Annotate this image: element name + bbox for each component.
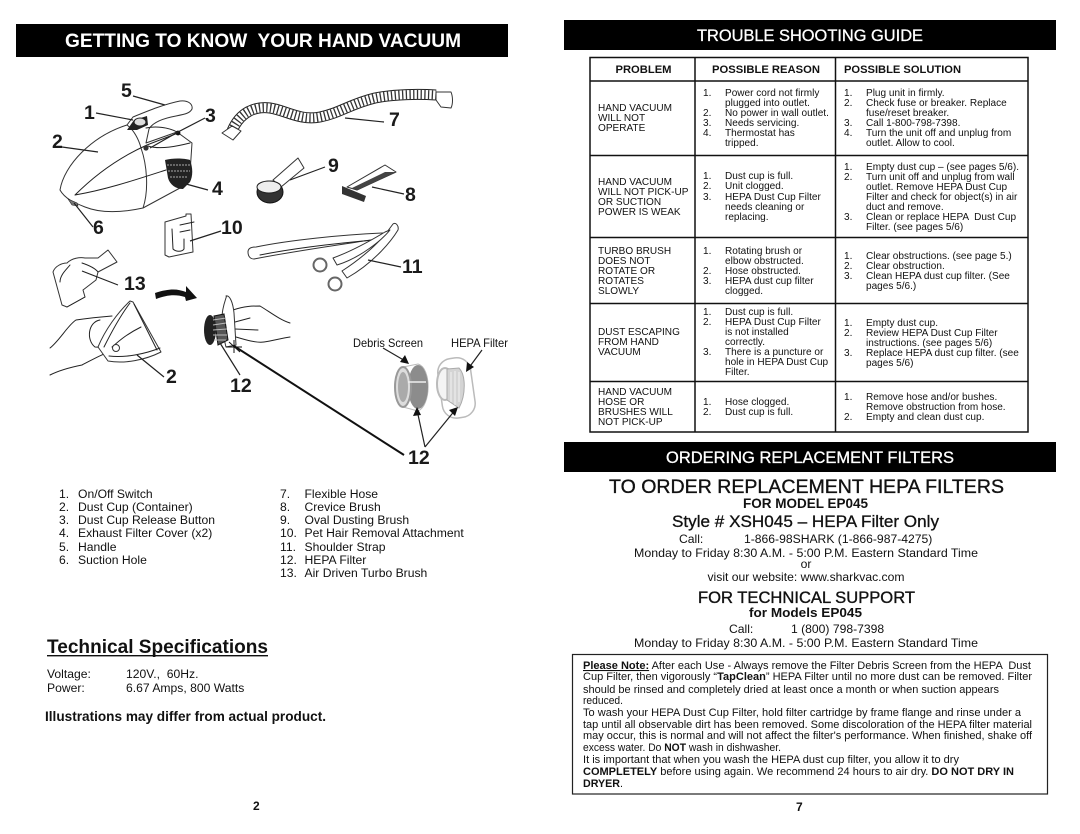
row: dust escaping: Filter.	[725, 367, 750, 378]
parts list: right column: 10.	[280, 526, 297, 540]
ordering information	[609, 477, 1004, 584]
icon: air driven turbo brush	[53, 250, 117, 307]
row: turbo brush: 3.	[703, 276, 711, 287]
row: turbo brush: Clear obstructions. (see page 5.)	[866, 251, 1012, 262]
table grid	[590, 58, 1028, 432]
icon: crevice brush	[342, 165, 396, 202]
page number 2: 2	[253, 799, 260, 813]
parts list: right column: 13.	[280, 566, 297, 580]
parts list: right column: Pet Hair Removal Attachment	[304, 526, 464, 540]
part number labels: 12	[408, 447, 430, 469]
row: dust escaping: 2.	[703, 317, 711, 328]
row: will not operate: 1.	[844, 88, 852, 99]
row: will not operate: No power in wall outlet.	[725, 108, 829, 119]
ordering information: FOR MODEL EP045	[743, 496, 868, 511]
row: turbo brush: SLOWLY	[598, 286, 639, 297]
table header: POSSIBLE SOLUTION	[844, 64, 961, 76]
parts list: right column: 7.	[280, 487, 290, 501]
row: will not pick-up: 2.	[844, 172, 852, 183]
row: will not operate: Power cord not firmly	[725, 88, 819, 99]
row: turbo brush: 1.	[703, 246, 711, 257]
illustration: hand vacuum parts diagram	[50, 80, 508, 469]
page number 7: 7	[796, 800, 803, 814]
row: will not pick-up: 2.	[703, 181, 711, 192]
row: will not pick-up: 3.	[844, 212, 852, 223]
row: hose or brushes: 1.	[844, 392, 852, 403]
specifications text: Voltage:	[47, 667, 91, 681]
parts list: left column: 6.	[59, 553, 69, 567]
row: will not pick-up: Turn unit off and unplug from wall	[866, 172, 1015, 183]
part number labels	[52, 80, 508, 469]
parts list: left column: 1.	[59, 487, 69, 501]
part number labels: 2	[166, 366, 177, 388]
icon: flexible hose	[222, 92, 452, 140]
row: hose or brushes: 1.	[703, 397, 711, 408]
part number labels: 7	[389, 109, 400, 131]
row: will not pick-up: Dust cup is full.	[725, 171, 793, 182]
row: dust escaping: VACUUM	[598, 347, 641, 358]
icon: hand holding dust cup	[50, 301, 161, 375]
row: hose or brushes: 2.	[703, 407, 711, 418]
row: will not operate: Turn the unit off and unplug from	[866, 128, 1011, 139]
note box: excess water. Do NOT wash in dishwasher.	[583, 742, 781, 754]
part number labels: 10	[221, 217, 243, 239]
row: turbo brush: HEPA dust cup filter	[725, 276, 814, 287]
row: will not pick-up: replacing.	[725, 212, 769, 223]
heading: technical specifications: Technical Specifications	[47, 637, 268, 658]
row: dust escaping: Dust cup is full.	[725, 307, 793, 318]
parts list: left column: Dust Cup (Container)	[78, 500, 193, 514]
row: turbo brush: ROTATES	[598, 276, 644, 287]
row: will not pick-up: HAND VACUUM	[598, 177, 672, 188]
row: will not operate: plugged into outlet.	[725, 98, 810, 109]
row: dust escaping: Review HEPA Dust Cup Filter	[866, 328, 998, 339]
note box: should be rinsed and completely dried at least once a month or when suction appears	[583, 684, 999, 696]
row: will not pick-up: POWER IS WEAK	[598, 207, 681, 218]
row: turbo brush: Hose obstructed.	[725, 266, 801, 277]
note box: It is important that when you wash the HEPA dust cup filter, you allow it to dry	[583, 754, 960, 766]
row: hose or brushes: Dust cup is full.	[725, 407, 793, 418]
row: dust escaping	[598, 307, 1019, 378]
row: will not operate: OPERATE	[598, 123, 646, 134]
row: turbo brush: 2.	[844, 261, 852, 272]
heading bar: ordering replacement filters	[564, 442, 1056, 472]
parts list: right column: 8.	[280, 500, 290, 514]
table header: POSSIBLE REASON	[712, 64, 820, 76]
icon: hand holding HEPA filter	[204, 296, 290, 347]
parts list: right column: Oval Dusting Brush	[304, 513, 409, 527]
heading bar: getting to know your hand vacuum: GETTING TO KNOW YOUR HAND VACUUM	[65, 31, 461, 52]
row: will not pick-up: OR SUCTION	[598, 197, 661, 208]
technical support information: Call:	[729, 622, 753, 636]
row: will not pick-up: WILL NOT PICK-UP	[598, 187, 689, 198]
icon: debris screen	[395, 364, 428, 411]
ordering information: Call:	[679, 532, 703, 546]
note box: reduced.	[583, 695, 623, 707]
row: will not pick-up	[598, 162, 1019, 233]
row: dust escaping: Empty dust cup.	[866, 318, 938, 329]
parts list: left column: On/Off Switch	[78, 487, 153, 501]
part number labels: Debris Screen	[353, 337, 423, 350]
row: will not operate: HAND VACUUM	[598, 103, 672, 114]
note box	[572, 654, 1048, 794]
parts list: left column: Dust Cup Release Button	[78, 513, 215, 527]
parts list: left column	[59, 487, 215, 567]
row: dust escaping: instructions. (see pages 5/6)	[866, 338, 992, 349]
row: hose or brushes: Remove hose and/or bushes.	[866, 392, 997, 403]
row: will not operate	[598, 88, 1011, 149]
row: will not operate: 3.	[703, 118, 711, 129]
ordering information: visit our website: www.sharkvac.com	[707, 570, 905, 584]
row: will not operate: Plug unit in firmly.	[866, 88, 945, 99]
row: turbo brush: ROTATE OR	[598, 266, 655, 277]
row: will not pick-up: 1.	[844, 162, 852, 173]
row: dust escaping: 3.	[844, 348, 852, 359]
row: will not pick-up: HEPA Dust Cup Filter	[725, 192, 822, 203]
disclaimer: Illustrations may differ from actual product.	[45, 709, 326, 724]
part number labels: 9	[328, 155, 339, 177]
row: will not pick-up: needs cleaning or	[725, 202, 805, 213]
specifications text	[47, 667, 244, 695]
row: dust escaping: correctly.	[725, 337, 765, 348]
ordering information: 1-866-98SHARK (1-866-987-4275)	[744, 532, 932, 546]
row: hose or brushes	[598, 387, 1006, 428]
note box: tap until all observable dirt has been removed. Some discoloration of the HEPA filter material	[583, 719, 1032, 731]
row: dust escaping: 1.	[844, 318, 852, 329]
heading bar: trouble shooting guide: TROUBLE SHOOTING GUIDE	[697, 27, 923, 45]
row: will not operate: Check fuse or breaker. Replace	[866, 98, 1007, 109]
row: dust escaping: HEPA Dust Cup Filter	[725, 317, 822, 328]
row: turbo brush: Clear obstruction.	[866, 261, 945, 272]
technical support information	[634, 589, 978, 650]
part number labels: HEPA Filter	[451, 337, 508, 350]
parts list: left column: Handle	[78, 540, 117, 554]
ordering information: or	[801, 557, 811, 571]
row: dust escaping: is not installed	[725, 327, 789, 338]
row: will not operate: outlet. Allow to cool.	[866, 138, 955, 149]
row: will not pick-up: 1.	[703, 171, 711, 182]
part number labels: 3	[205, 105, 216, 127]
part number labels: 1	[84, 102, 95, 124]
parts list: left column: 2.	[59, 500, 69, 514]
note box: DRYER.	[583, 778, 623, 790]
note box: COMPLETELY before using again. We recommend 24 hours to air dry. DO NOT DRY IN	[583, 766, 1014, 778]
icon: oval dusting brush	[257, 158, 304, 203]
row: hose or brushes: HAND VACUUM	[598, 387, 672, 398]
table header	[616, 64, 961, 76]
ordering information: TO ORDER REPLACEMENT HEPA FILTERS	[609, 477, 1004, 498]
row: will not operate: 4.	[844, 128, 852, 139]
parts list: right column: Air Driven Turbo Brush	[304, 566, 427, 580]
row: turbo brush: DOES NOT	[598, 256, 650, 267]
row: hose or brushes: Hose clogged.	[725, 397, 789, 408]
part number labels: 4	[212, 178, 223, 200]
technical support information: FOR TECHNICAL SUPPORT	[698, 589, 915, 607]
parts list: right column: Crevice Brush	[304, 500, 381, 514]
row: hose or brushes: HOSE OR	[598, 397, 644, 408]
row: hose or brushes: BRUSHES WILL	[598, 407, 673, 418]
parts list: right column: 9.	[280, 513, 290, 527]
row: will not operate: Call 1-800-798-7398.	[866, 118, 960, 129]
row: will not pick-up: Filter and check for object(s) in air	[866, 192, 1018, 203]
ordering information: Style # XSH045 – HEPA Filter Only	[672, 512, 940, 531]
row: hose or brushes: 2.	[844, 412, 852, 423]
row: will not pick-up: outlet. Remove HEPA Dust Cup	[866, 182, 1008, 193]
part number labels: 12	[230, 375, 252, 397]
row: will not pick-up: Clean or replace HEPA Dust Cup	[866, 212, 1016, 223]
row: dust escaping: FROM HAND	[598, 337, 659, 348]
row: dust escaping: 1.	[703, 307, 711, 318]
specifications text: 6.67 Amps, 800 Watts	[126, 681, 244, 695]
part number labels: 8	[405, 184, 416, 206]
icon: shoulder strap	[248, 223, 398, 290]
part number labels: 2	[52, 131, 63, 153]
row: will not pick-up: duct and remove.	[866, 202, 944, 213]
icon: pet hair removal attachment	[165, 214, 194, 257]
heading bar: ordering replacement filters: ORDERING REPLACEMENT FILTERS	[666, 449, 954, 467]
row: will not pick-up: 3.	[703, 192, 711, 203]
table header: PROBLEM	[616, 64, 672, 76]
row: will not operate: 4.	[703, 128, 711, 139]
row: will not operate: Thermostat has	[725, 128, 795, 139]
row: will not operate: WILL NOT	[598, 113, 645, 124]
note box: Please Note: After each Use - Always remove the Filter Debris Screen from the HEPA Dust	[583, 660, 1031, 672]
specifications text: Power:	[47, 681, 85, 695]
row: turbo brush: 2.	[703, 266, 711, 277]
row: will not pick-up: Filter. (see pages 5/6)	[866, 222, 963, 233]
parts list: right column: 11.	[280, 540, 296, 554]
row: dust escaping: 3.	[703, 347, 711, 358]
technical support information: Monday to Friday 8:30 A.M. - 5:00 P.M. Eastern Standard Time	[634, 636, 978, 650]
icon: HEPA filter	[436, 356, 477, 420]
row: dust escaping: DUST ESCAPING	[598, 327, 680, 338]
ordering information: Monday to Friday 8:30 A.M. - 5:00 P.M. Eastern Standard Time	[634, 546, 978, 560]
row: dust escaping: There is a puncture or	[725, 347, 824, 358]
row: turbo brush: Clean HEPA dust cup filter. (See	[866, 271, 1010, 282]
troubleshooting table	[590, 58, 1028, 432]
row: turbo brush: elbow obstructed.	[725, 256, 804, 267]
parts list: left column: Exhaust Filter Cover (x2)	[78, 526, 212, 540]
row: will not operate: 2.	[844, 98, 852, 109]
parts list: left column: 5.	[59, 540, 69, 554]
row: will not operate: fuse/reset breaker.	[866, 108, 949, 119]
heading bar: getting to know your hand vacuum	[16, 24, 508, 57]
specifications text: 120V., 60Hz.	[126, 667, 198, 681]
note box: Cup Filter, then vigorously “ TapClean” HEPA Filter until no more dust can be removed. Filter	[583, 671, 1032, 683]
row: hose or brushes: Remove obstruction from hose.	[866, 402, 1006, 413]
row: dust escaping: Replace HEPA dust cup filter. (see	[866, 348, 1019, 359]
part number labels: 6	[93, 217, 104, 239]
row: turbo brush: 3.	[844, 271, 852, 282]
technical support information: 1 (800) 798-7398	[791, 622, 884, 636]
parts list: right column: HEPA Filter	[304, 553, 366, 567]
row: will not operate: 1.	[703, 88, 711, 99]
row: will not pick-up: Empty dust cup – (see pages 5/6).	[866, 162, 1019, 173]
row: will not operate: 2.	[703, 108, 711, 119]
note box: may occur, this is normal and will not affect the filter's performance. When finished, shake off	[583, 730, 1032, 742]
note box: To wash your HEPA Dust Cup Filter, hold filter cartridge by frame flange and rinse under a	[583, 707, 1021, 719]
row: will not pick-up: Unit clogged.	[725, 181, 784, 192]
row: will not operate: tripped.	[725, 138, 759, 149]
row: hose or brushes: Empty and clean dust cup.	[866, 412, 984, 423]
row: turbo brush: TURBO BRUSH	[598, 246, 671, 257]
parts list: right column	[280, 487, 464, 580]
row: turbo brush: Rotating brush or	[725, 246, 803, 257]
parts list: right column: 12.	[280, 553, 297, 567]
row: turbo brush: clogged.	[725, 286, 763, 297]
part number labels: 13	[124, 273, 146, 295]
row: will not operate: Needs servicing.	[725, 118, 799, 129]
parts list: right column: Shoulder Strap	[304, 540, 386, 554]
icon: curved arrow	[155, 286, 197, 301]
part number labels: 11	[402, 256, 423, 278]
parts list: left column: 4.	[59, 526, 69, 540]
row: turbo brush: pages 5/6.)	[866, 281, 916, 292]
part number labels: 5	[121, 80, 132, 102]
row: turbo brush	[598, 246, 1012, 297]
technical support information: for Models EP045	[749, 605, 862, 620]
row: dust escaping: pages 5/6)	[866, 358, 913, 369]
heading bar: trouble shooting guide	[564, 20, 1056, 50]
parts list: left column: 3.	[59, 513, 69, 527]
row: hose or brushes: NOT PICK-UP	[598, 417, 663, 428]
row: turbo brush: 1.	[844, 251, 852, 262]
row: will not operate: 3.	[844, 118, 852, 129]
leader lines	[62, 96, 482, 455]
row: dust escaping: 2.	[844, 328, 852, 339]
parts list: left column: Suction Hole	[78, 553, 147, 567]
icon: hand vacuum	[60, 101, 192, 212]
row: dust escaping: hole in HEPA Dust Cup	[725, 357, 829, 368]
parts list: right column: Flexible Hose	[304, 487, 378, 501]
